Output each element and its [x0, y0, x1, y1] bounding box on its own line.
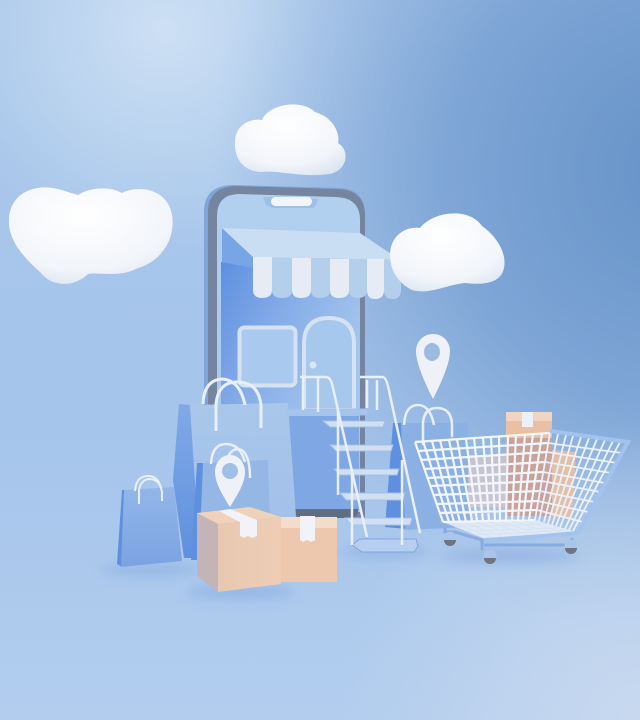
stair base: [352, 539, 418, 552]
cart undercarriage: [445, 527, 572, 550]
phone notch: [263, 197, 318, 208]
shop door: [304, 318, 354, 410]
cloud: top: [235, 104, 346, 175]
stair railings: [300, 377, 420, 545]
cart mesh: side face: [535, 433, 622, 531]
shopping bag: small: [117, 476, 182, 567]
floor shadows: [100, 547, 580, 598]
shop window: [240, 328, 296, 386]
box tape: [300, 516, 315, 542]
cart wheels: [444, 532, 578, 564]
shipping box: large: [197, 507, 281, 592]
stairs: [288, 377, 420, 552]
boxes inside cart: [468, 412, 576, 518]
location pin: bags: [215, 455, 245, 507]
lower phone wall: [289, 416, 359, 518]
shopping cart: [415, 412, 628, 564]
cloud: left: [9, 187, 173, 284]
shopping bag: right: [385, 405, 470, 530]
cart mesh: front face: [415, 433, 550, 522]
shopping bag: large: [173, 379, 296, 560]
cart mesh: bottom: [453, 521, 568, 537]
phone body: [204, 185, 365, 518]
shop wall: [221, 262, 360, 410]
awning: [222, 228, 401, 299]
box tape: [219, 509, 257, 538]
cart basket bottom: [443, 520, 577, 538]
location pin: right: [416, 334, 450, 399]
shipping box: small: [281, 516, 337, 582]
cloud: right: [390, 213, 504, 291]
stair steps: [288, 409, 412, 525]
cart rim: [484, 431, 628, 541]
shopping bag: medium: [191, 444, 271, 560]
phone storefront: [204, 185, 401, 518]
